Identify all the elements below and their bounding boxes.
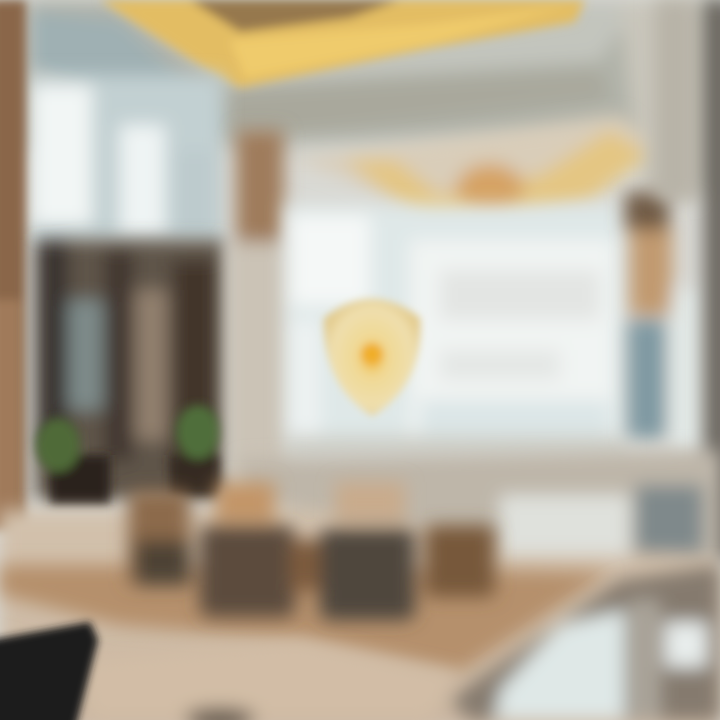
lounge chairs [128, 482, 495, 620]
rug [0, 565, 610, 672]
plants [36, 405, 220, 505]
left pillar [0, 0, 26, 530]
gold shield emblem [324, 299, 420, 416]
dark foreground chair [0, 622, 98, 720]
central pillar [228, 130, 288, 480]
ceiling [0, 0, 720, 200]
right wall edge [655, 0, 720, 560]
dark doors [35, 240, 225, 500]
left windows [28, 75, 223, 245]
second ceiling gold panel [290, 115, 650, 222]
gold ceiling panel [100, 0, 585, 88]
main window [285, 205, 625, 460]
floor [0, 450, 720, 720]
polished floor reflection [80, 565, 720, 720]
right pillar [625, 192, 702, 450]
